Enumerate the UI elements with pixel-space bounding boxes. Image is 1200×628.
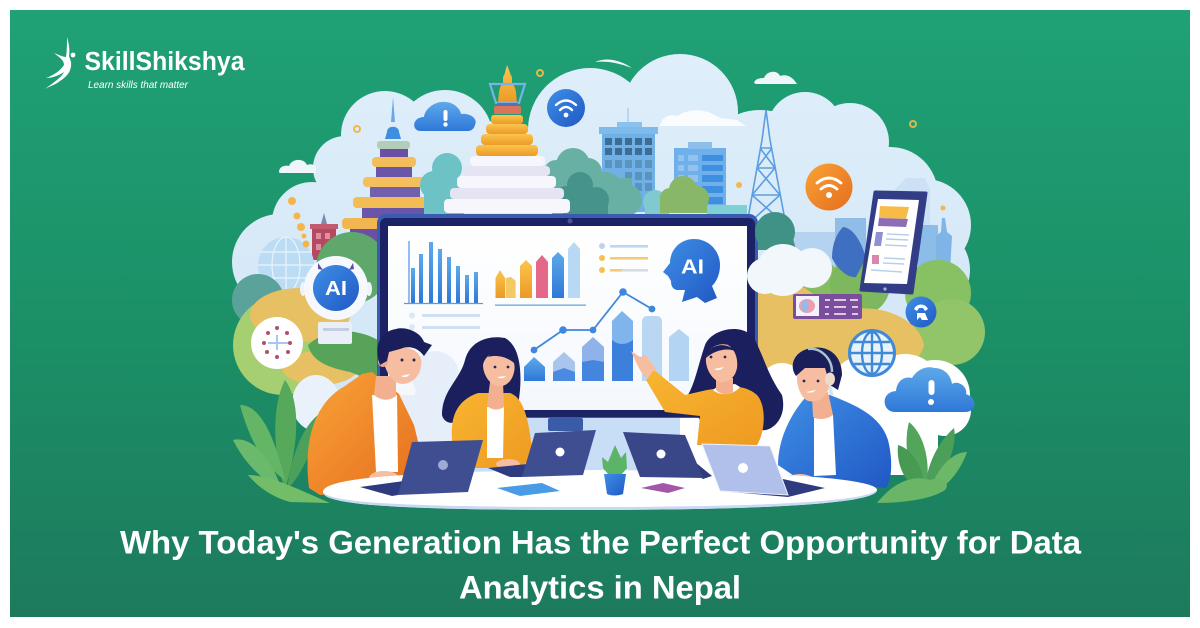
logo icon: leaping figure swoosh	[45, 37, 75, 89]
icon: globe	[850, 330, 894, 376]
pointing hand	[631, 351, 656, 378]
head	[797, 363, 830, 402]
robot with AI badge	[300, 256, 372, 344]
left foliage and hills	[232, 232, 388, 395]
blue tablet on table	[497, 483, 560, 496]
jacket	[308, 372, 425, 495]
hair	[442, 337, 520, 423]
shirt	[487, 407, 504, 458]
table edge shadow	[323, 490, 877, 510]
head	[483, 352, 515, 386]
laptop two	[488, 430, 596, 477]
hair	[377, 328, 432, 365]
left white blob	[292, 375, 340, 431]
teal trees by stupa	[420, 153, 467, 215]
title	[120, 524, 1081, 606]
person: man with headset in blue jacket	[778, 347, 891, 488]
person: woman in yellow sweater	[631, 329, 783, 445]
gold flower ornaments	[288, 70, 946, 248]
laptop three	[623, 432, 712, 479]
hair	[793, 347, 842, 390]
bar chart	[404, 241, 483, 304]
icon: blue phone badge	[906, 296, 936, 328]
right leafy plant	[877, 422, 967, 503]
faint globe	[258, 237, 314, 293]
head	[383, 348, 421, 384]
laptops on table	[360, 430, 825, 497]
logo wordmark: SkillShikshya	[84, 48, 245, 76]
AI head icon: AI	[681, 256, 704, 278]
background cloud mass	[232, 54, 971, 400]
alert cloud top	[414, 102, 476, 131]
small decorative clouds	[279, 60, 797, 173]
shirt	[372, 395, 398, 472]
house shaped bar chart	[495, 242, 586, 306]
title line two: Analytics in Nepal	[459, 570, 741, 606]
lattice tower	[745, 110, 788, 236]
white cloud lower right	[680, 354, 971, 478]
legend list	[599, 243, 648, 273]
small text lines in screen	[409, 312, 480, 330]
wall behind table	[430, 400, 680, 485]
smartphone	[861, 192, 926, 293]
hand	[369, 471, 399, 485]
data dashboard card	[793, 294, 862, 319]
head	[716, 378, 733, 394]
headset	[808, 349, 832, 372]
icon: orange wifi badge	[806, 164, 852, 210]
laptop one	[360, 440, 483, 496]
icon: blue wifi badge	[547, 89, 585, 127]
bars and trend line chart	[524, 288, 689, 381]
left pagoda	[342, 97, 440, 243]
title line one: Why Today's Generation Has the Perfect Opportunity for Data	[120, 524, 1081, 560]
logo tagline: Learn skills that matter	[88, 79, 188, 91]
left leafy plant	[233, 380, 330, 503]
office building two	[674, 142, 726, 210]
large monitor	[377, 214, 758, 418]
soft cloud behind people	[395, 351, 466, 480]
red brick tower	[310, 213, 338, 260]
laptop four	[702, 444, 825, 497]
potted plant	[602, 445, 627, 496]
person: woman in amber jacket	[442, 337, 533, 469]
office building one	[599, 108, 658, 212]
city skyline	[790, 178, 952, 275]
right side scene: ground and bushes	[747, 212, 985, 376]
purple card on table	[641, 483, 685, 493]
alert cloud lower right	[885, 367, 975, 412]
bright sky cloud bank	[660, 110, 746, 126]
jacket	[452, 393, 533, 468]
hair	[686, 329, 783, 430]
person: man in orange jacket	[308, 328, 432, 495]
table	[323, 470, 877, 510]
jacket	[778, 395, 891, 488]
logo: SkillShikshya	[45, 37, 245, 91]
robot with AI badge: AI	[325, 278, 347, 300]
clock network badge	[251, 317, 303, 369]
monitor stand	[548, 418, 583, 431]
sweater and raised arm	[646, 370, 764, 445]
AI head icon	[663, 239, 720, 303]
stupa	[444, 65, 570, 213]
shirt	[814, 415, 836, 476]
trees by buildings	[544, 148, 747, 216]
